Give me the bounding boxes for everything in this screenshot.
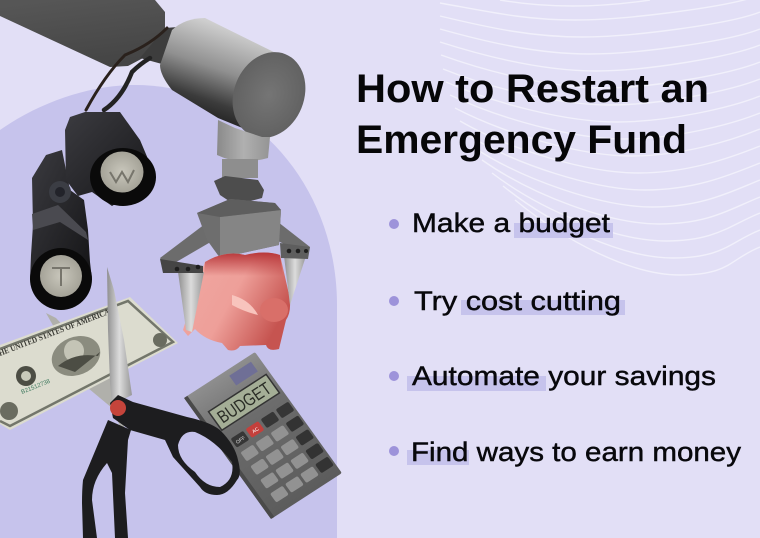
upper arm <box>0 0 165 67</box>
lower barrel band <box>32 205 88 240</box>
portrait <box>46 329 106 383</box>
serial number: B21512738 <box>21 379 52 396</box>
pig highlight <box>232 295 258 315</box>
title <box>356 67 709 162</box>
arch panel <box>0 85 337 538</box>
upper blade <box>107 267 132 405</box>
list item: find ways to earn money: Find ways to earn money <box>411 437 742 467</box>
claw block <box>197 199 281 258</box>
title: Emergency Fund <box>356 118 687 162</box>
display: BUDGET <box>213 378 275 427</box>
scissors lower blade <box>46 313 126 440</box>
corner numeral <box>0 402 18 420</box>
lower barrel <box>30 150 92 280</box>
right claw strut <box>276 222 310 252</box>
binoculars <box>30 28 167 310</box>
title: How to Restart an <box>356 67 709 111</box>
seal <box>16 366 36 386</box>
cylinder end face <box>220 41 318 149</box>
claw block front <box>220 210 281 258</box>
arm neck <box>140 27 178 64</box>
lower arm cylinder <box>160 18 290 136</box>
upper lens <box>90 148 156 206</box>
large handle <box>110 395 240 495</box>
contour line pattern <box>440 0 760 275</box>
claw nut <box>214 176 264 205</box>
lower lens <box>30 248 92 310</box>
calculator <box>184 352 342 519</box>
straps <box>86 28 167 110</box>
list item: automate your savings: Automate your savings <box>412 361 716 391</box>
claw stem <box>217 120 270 161</box>
solar panel <box>229 362 258 385</box>
claw block top <box>197 199 281 217</box>
left finger plate <box>160 259 203 273</box>
right finger <box>284 256 306 305</box>
left finger <box>178 272 204 332</box>
list item: try cost cutting: Try cost cutting <box>414 286 621 316</box>
claw neck <box>222 159 258 178</box>
dollar bill <box>0 297 178 430</box>
piggy bank <box>183 252 290 350</box>
bill lettering: HE UNITED STATES OF AMERICA <box>0 306 112 358</box>
right finger plate <box>280 243 310 259</box>
list item: make a budget: Make a budget <box>412 208 611 238</box>
keypad: OFF <box>235 435 247 446</box>
keypad <box>230 402 334 503</box>
claw fingers <box>160 243 310 332</box>
hinge <box>49 181 71 203</box>
upper barrel <box>65 112 156 206</box>
small handle <box>82 420 131 538</box>
pivot <box>110 400 126 416</box>
pig snout <box>260 298 288 322</box>
scissors <box>82 267 240 538</box>
hinge cap <box>55 187 65 197</box>
left claw strut <box>160 224 214 268</box>
robot arm and claw <box>0 0 318 268</box>
keypad: AC <box>251 426 261 435</box>
